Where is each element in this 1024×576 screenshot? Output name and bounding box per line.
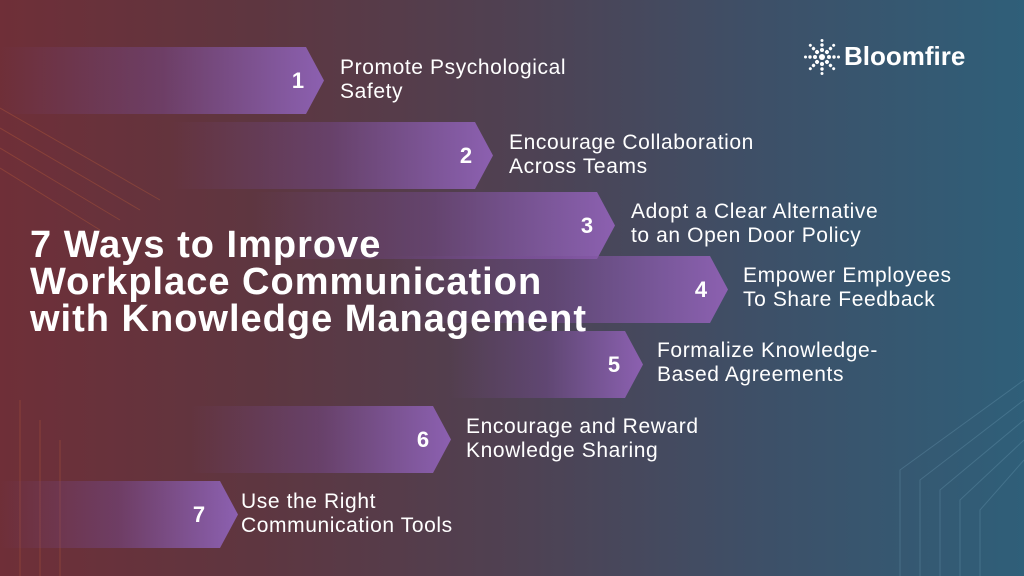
arrow 6 (216, 406, 451, 473)
text: 3 (581, 213, 593, 238)
text: Formalize Knowledge- (657, 339, 878, 362)
text: 1 (292, 68, 304, 93)
item texts (241, 56, 952, 537)
text: to an Open Door Policy (631, 224, 861, 247)
text: To Share Feedback (743, 288, 935, 311)
text: Adopt a Clear Alternative (631, 200, 878, 223)
text: Use the Right (241, 490, 376, 513)
title: Workplace Communication (30, 261, 542, 303)
arrow 3 (290, 192, 615, 259)
text: 6 (417, 427, 429, 452)
arrow 1 (0, 47, 324, 114)
text: Knowledge Sharing (466, 439, 658, 462)
text: Across Teams (509, 155, 648, 178)
title: 7 Ways to Improve (30, 224, 381, 266)
text: Promote Psychological (340, 56, 566, 79)
text: 7 (193, 502, 205, 527)
text: Encourage Collaboration (509, 131, 754, 154)
text: 5 (608, 352, 620, 377)
icon: bloom (804, 39, 840, 75)
logo text: Bloomfire (844, 41, 965, 71)
arrow 7 (0, 481, 238, 548)
arrow 2 (204, 122, 493, 189)
arrow 4 (422, 256, 728, 323)
arrow 5 (474, 331, 643, 398)
numbers (193, 50, 836, 527)
text: Communication Tools (241, 514, 453, 537)
title (30, 224, 587, 340)
text: 4 (695, 277, 707, 302)
text: Encourage and Reward (466, 415, 699, 438)
text: Based Agreements (657, 363, 844, 386)
text: 2 (460, 143, 472, 168)
logo (804, 39, 965, 75)
title: with Knowledge Management (30, 298, 587, 340)
text: Empower Employees (743, 264, 952, 287)
text: Safety (340, 80, 403, 103)
